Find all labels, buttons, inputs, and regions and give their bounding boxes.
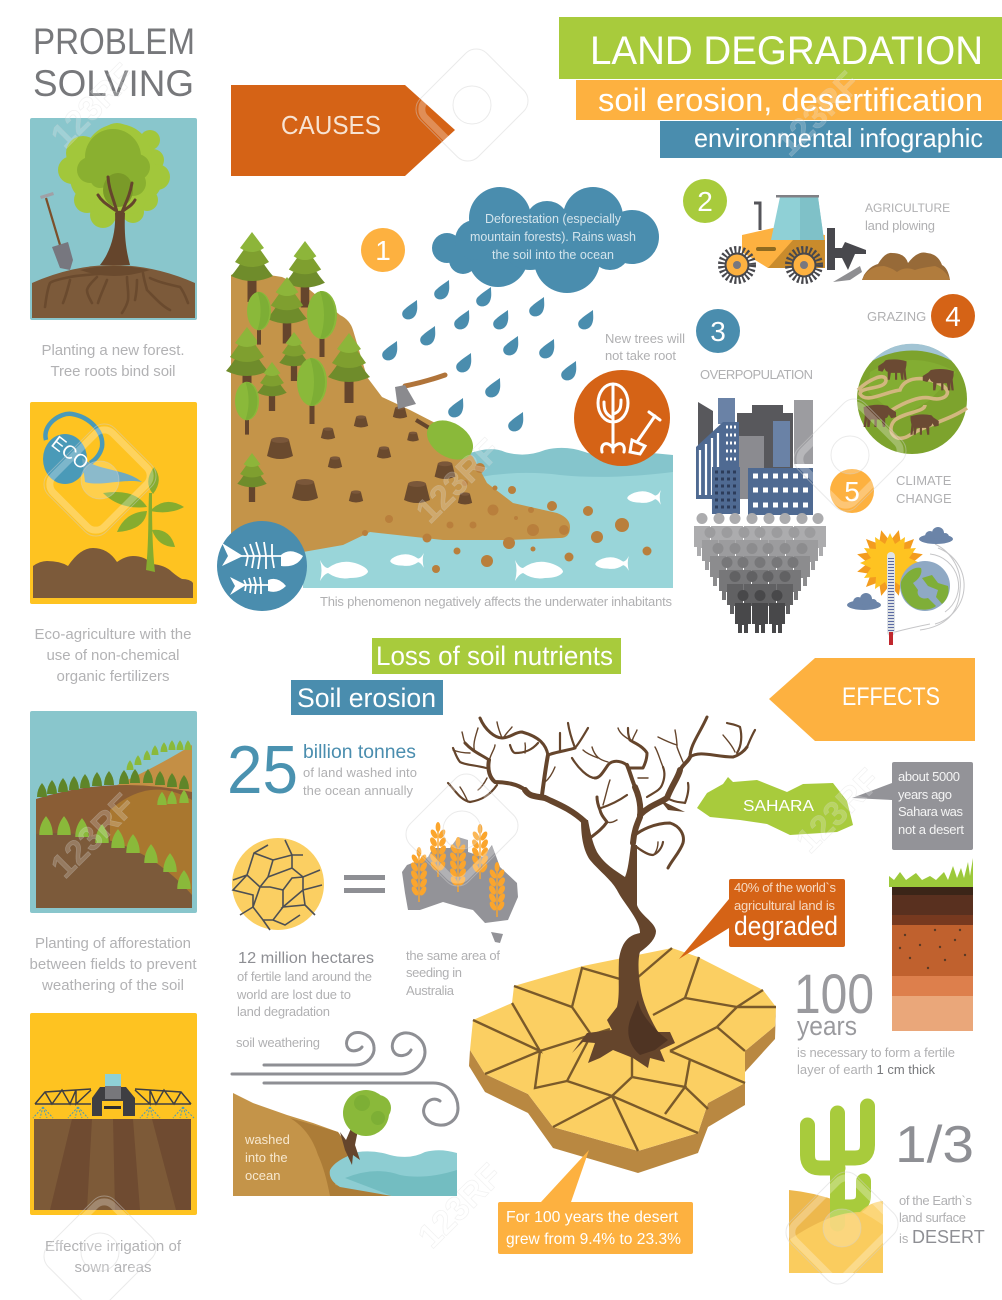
- tree trunk: [98, 177, 135, 265]
- branches: [448, 717, 755, 868]
- watermarks: 123RF: [409, 432, 508, 531]
- title: problem solving: [33, 21, 195, 104]
- watermarks: 123RF: [44, 57, 143, 156]
- stat: one third desert: land surface: [899, 1210, 966, 1225]
- callout: 40 percent degraded: degraded: [734, 911, 838, 941]
- text: washed into the ocean: [244, 1132, 290, 1183]
- slope: [290, 1118, 392, 1196]
- island top: [470, 948, 776, 1151]
- icon: axe: [395, 375, 445, 409]
- caption: afforestation: weathering of the soil: [41, 977, 184, 994]
- sprayer machine: [92, 1074, 135, 1116]
- icon: pasture globe: [857, 344, 967, 454]
- icon: wind: [232, 1033, 458, 1125]
- caption: eco-agriculture: Eco-agriculture with the: [34, 626, 192, 643]
- eroded hillside: [231, 273, 570, 552]
- leafy trees: [235, 291, 337, 435]
- banner: environmental infographic: environmental infographic: [694, 123, 983, 153]
- tree rows: [37, 769, 189, 797]
- badge 5: [830, 469, 874, 513]
- water: [330, 1150, 457, 1196]
- badge 3: 3: [710, 316, 726, 347]
- badge 2: [683, 179, 727, 223]
- caption: afforestation: Planting of afforestation: [35, 935, 191, 952]
- sea: [303, 472, 673, 588]
- cause: grazing: [857, 294, 975, 454]
- callout: sahara past: Sahara was: [898, 804, 964, 819]
- arrow: causes: CAUSES: [281, 110, 381, 140]
- caption: climate change: CLIMATE: [896, 473, 952, 488]
- stat: 100 years: 100: [794, 962, 874, 1025]
- stat: 25 billion tonnes: billion tonnes: [303, 742, 416, 763]
- icon: cactus in desert: [789, 1106, 883, 1273]
- icon: australia with wheat: [402, 822, 518, 943]
- fish: [320, 490, 661, 581]
- tree crown: [58, 123, 170, 228]
- text: washed into the ocean: ocean: [245, 1168, 280, 1183]
- caption: grazing: GRAZING: [867, 309, 926, 324]
- soil layers column: [889, 858, 973, 1031]
- trunk base shading: [628, 1000, 668, 1055]
- stat: 100 years: [794, 962, 955, 1077]
- caption: eco-agriculture: organic fertilizers: [56, 668, 170, 685]
- soil with roots: [32, 265, 195, 318]
- caption: planting a new forest: Planting a new forest.: [42, 342, 184, 359]
- icon: watering can: [43, 414, 142, 484]
- text: same area of seeding: the same area of: [406, 948, 500, 963]
- caption: climate change: CHANGE: [896, 491, 952, 506]
- watermarks: 123RF: [789, 762, 888, 861]
- soil hills: [33, 548, 193, 598]
- hills: [36, 745, 192, 908]
- spray boom: [35, 1089, 191, 1104]
- equals sign: [344, 875, 385, 893]
- arrow: effects: [769, 658, 975, 741]
- caption: new trees: not take root: [605, 348, 676, 363]
- stat: one third desert: of the Earth`s: [899, 1193, 972, 1208]
- badge 1: [361, 228, 405, 272]
- text: same area of seeding: [406, 948, 500, 998]
- text: washed into the ocean: into the: [245, 1150, 288, 1165]
- soil particles: [362, 463, 652, 573]
- cracked earth island: [469, 948, 776, 1173]
- callout: 40 percent degraded: [679, 879, 845, 959]
- stat: 100 years: layer of earth 1 cm thick: [797, 1062, 936, 1077]
- cracks: [473, 948, 776, 1151]
- caption: eco-agriculture: use of non-chemical: [46, 647, 180, 664]
- icon: rain cloud: [432, 187, 659, 293]
- icon: dirt piles: [862, 252, 950, 280]
- caption: irrigation: sown areas: [74, 1259, 152, 1276]
- callout: desert growth: grew from 9.4% to 23.3%: [506, 1231, 681, 1248]
- cause: overpopulation: [694, 309, 826, 633]
- callout: sahara past: not a desert: [898, 822, 964, 837]
- caption: irrigation: Effective irrigation of: [45, 1238, 182, 1255]
- small tree: [340, 1090, 391, 1165]
- panel: afforestation: [30, 711, 197, 913]
- icon: plant: [103, 467, 184, 572]
- icon: sun: [848, 521, 932, 605]
- text: 12 million hectares: [236, 950, 374, 1019]
- text: 12 million hectares: of fertile land around the: [237, 969, 372, 984]
- callout: sahara past: about 5000: [898, 769, 960, 784]
- trunk: [572, 820, 675, 1068]
- caption: underwater inhabitants: This phenomenon negatively affects the underwater inhabitants: [320, 594, 672, 609]
- sea back layer: [465, 448, 673, 480]
- dead tree: [448, 717, 755, 1068]
- caption: agriculture: land plowing: [865, 218, 935, 233]
- cloud text: [470, 212, 636, 262]
- conifer trees: [226, 232, 370, 502]
- rain drops: [382, 280, 593, 431]
- caption: eco-agriculture: [34, 626, 192, 685]
- watermarks: 123RF: [769, 65, 868, 164]
- icon: thermometer: [887, 552, 895, 645]
- callout: 40 percent degraded: agricultural land is: [734, 898, 836, 913]
- text: same area of seeding: Australia: [406, 983, 455, 998]
- banner: soil erosion, desertification: soil erosion, desertification: [598, 82, 983, 118]
- badge 3: [696, 309, 740, 353]
- stat: one third desert: 1/3: [895, 1116, 974, 1174]
- badge 2: 2: [697, 186, 713, 217]
- title: problem solving: PROBLEM: [33, 21, 195, 62]
- map: sahara: [697, 777, 853, 835]
- title: problem solving: SOLVING: [33, 63, 194, 104]
- caption: new trees: [605, 331, 685, 363]
- scene: washed into the ocean: [233, 1090, 457, 1196]
- callout: desert growth: [498, 1150, 693, 1254]
- stat: 25 billion tonnes: of land washed into: [303, 765, 417, 780]
- cloud text: Deforestation (especially: [485, 212, 622, 226]
- caption: planting a new forest: [42, 342, 184, 380]
- icon: new trees will not root: [574, 370, 670, 466]
- watermarks: 123RF: [411, 1157, 510, 1256]
- caption: irrigation: [45, 1238, 182, 1276]
- panel: planting a new forest: [30, 118, 197, 320]
- badge 5: 5: [844, 476, 860, 507]
- cause: agriculture: [683, 179, 950, 282]
- grass: [889, 858, 973, 887]
- callout: desert growth: For 100 years the desert: [506, 1209, 679, 1226]
- watermarks: 123RF: [44, 787, 143, 886]
- callout: sahara past: [852, 762, 973, 850]
- cause: climate change: [830, 469, 964, 645]
- caption: afforestation: between fields to prevent: [30, 956, 197, 973]
- label: loss of soil nutrients: Loss of soil nutrients: [376, 641, 613, 671]
- island side: [469, 1007, 776, 1173]
- stat: one third desert: is DESERT: [899, 1227, 985, 1247]
- icon: earth with orbits: [895, 544, 964, 632]
- crowd of people: [694, 513, 826, 633]
- icon: shovel: [40, 192, 73, 270]
- banner: land degradation: [559, 17, 1002, 79]
- banner: land degradation: LAND DEGRADATION: [590, 29, 983, 73]
- icon: clouds: [847, 527, 953, 610]
- text: soil weathering: soil weathering: [236, 1035, 320, 1050]
- text: washed into the ocean: washed: [244, 1132, 290, 1147]
- caption: overpopulation: OVERPOPULATION: [700, 367, 813, 382]
- land: [233, 1093, 392, 1196]
- icon: fish skeletons: [217, 521, 307, 611]
- icon: cracked soil circle: [232, 838, 324, 930]
- cloud text: mountain forests). Rains wash: [470, 230, 636, 244]
- arrow: effects: EFFECTS: [842, 683, 940, 711]
- caption: agriculture: AGRICULTURE: [865, 201, 950, 215]
- badge 4: 4: [945, 301, 961, 332]
- text: 12 million hectares: world are lost due to: [236, 987, 351, 1002]
- badge 1: 1: [375, 235, 391, 266]
- cloud text: the soil into the ocean: [492, 248, 614, 262]
- panel: irrigation: [30, 1013, 197, 1215]
- label: soil erosion: Soil erosion: [297, 683, 436, 713]
- city skyline: [696, 398, 813, 515]
- text: same area of seeding: seeding in: [406, 965, 462, 980]
- icon: watering can: ECO: [47, 432, 92, 474]
- arrow: causes: [231, 85, 455, 176]
- icon: tractor: [722, 195, 866, 282]
- map: sahara: SAHARA: [743, 798, 814, 815]
- stat: 25 billion tonnes: 25: [227, 732, 298, 808]
- water spray: [33, 1107, 194, 1118]
- caption: climate change: [896, 473, 952, 506]
- callout: 40 percent degraded: 40% of the world`s: [734, 880, 836, 895]
- stat: 25 billion tonnes: [227, 732, 417, 808]
- panel: eco-agriculture: [30, 402, 197, 604]
- text: 12 million hectares: 12 million hectares: [238, 950, 374, 967]
- stat: 100 years: years: [797, 1011, 857, 1041]
- badge 4: [931, 294, 975, 338]
- stat: 100 years: is necessary to form a fertile: [797, 1045, 955, 1060]
- tree stumps: [267, 406, 472, 504]
- caption: new trees: New trees will: [605, 331, 685, 346]
- text: 12 million hectares: land degradation: [237, 1004, 330, 1019]
- fallen tree: [416, 412, 480, 468]
- stat: one third desert: [895, 1116, 985, 1247]
- caption: agriculture: [865, 201, 950, 233]
- caption: planting a new forest: Tree roots bind soil: [50, 363, 176, 380]
- field: [34, 1119, 191, 1210]
- callout: sahara past: years ago: [898, 787, 952, 802]
- panel: deforestation scene: [217, 187, 685, 611]
- caption: afforestation: [30, 935, 197, 994]
- stat: 25 billion tonnes: the ocean annually: [303, 783, 414, 798]
